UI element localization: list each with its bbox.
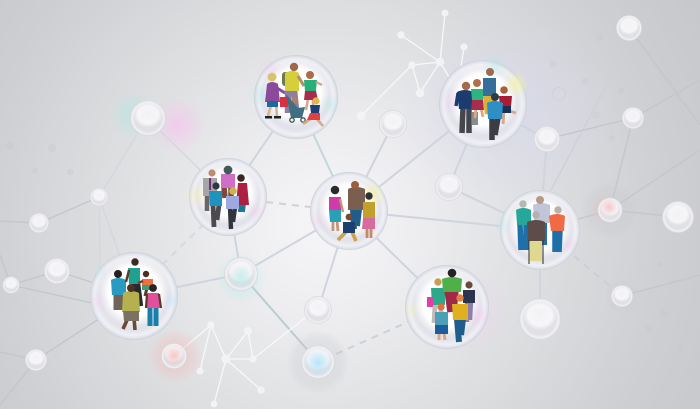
person: man in yellow: [452, 294, 468, 342]
person: woman in yellow top and pink skirt: [362, 192, 375, 238]
person: woman blue top yellow trousers: [483, 68, 496, 114]
person: woman green and maroon: [471, 79, 484, 118]
bubble: seniors group: [493, 190, 580, 270]
bubble: centre family: [307, 172, 388, 250]
person: child in navy: [338, 214, 356, 241]
person: woman in teal: [516, 200, 531, 250]
coloured glows: [110, 91, 640, 394]
person: woman in orange: [549, 206, 565, 252]
person: woman in magenta: [329, 186, 343, 231]
bubble: group bottom right: [401, 265, 491, 349]
person: woman in dark jacket: [463, 281, 475, 322]
person: man in navy: [456, 82, 478, 133]
person: woman in red coat: [236, 174, 249, 212]
person: child in orange: [138, 271, 153, 296]
person: woman in pink: [146, 284, 161, 326]
person: woman in green: [304, 71, 322, 110]
faint background dots: [6, 33, 683, 350]
white network: top: [356, 10, 468, 120]
person: man with backpack: [282, 63, 304, 113]
person: man in teal: [126, 258, 141, 307]
person: boy in red running: [499, 86, 516, 124]
person: large woman in green: [442, 269, 462, 312]
person: woman in lilac: [226, 187, 239, 229]
person: man in brown: [348, 181, 365, 229]
person: running child: [303, 97, 323, 126]
person: man in blue back: [209, 182, 222, 227]
person: boy in blue: [435, 303, 448, 340]
person: woman in olive from behind: [122, 284, 140, 330]
bubble: group bottom left: [86, 252, 182, 340]
bubble: family with stroller: [249, 55, 341, 139]
bubble: group of five top right: [437, 53, 529, 148]
person: man in grey suit: [203, 169, 217, 211]
person: tall man in light shirt: [533, 196, 550, 245]
person: woman in purple: [265, 73, 285, 118]
white network: bottom: [174, 318, 305, 407]
icon: stroller and shopping bag: [280, 94, 305, 122]
bubble: group of five left: [184, 158, 267, 236]
person: man in blue from behind: [487, 93, 503, 140]
person: woman in blue: [111, 270, 126, 310]
person: man with walker: [527, 211, 545, 264]
dashed connection lines: [162, 202, 612, 354]
person: woman in pink hijab: [221, 166, 235, 198]
connection lines: inner network: [99, 97, 547, 362]
person: woman in teal with bag: [427, 278, 445, 323]
